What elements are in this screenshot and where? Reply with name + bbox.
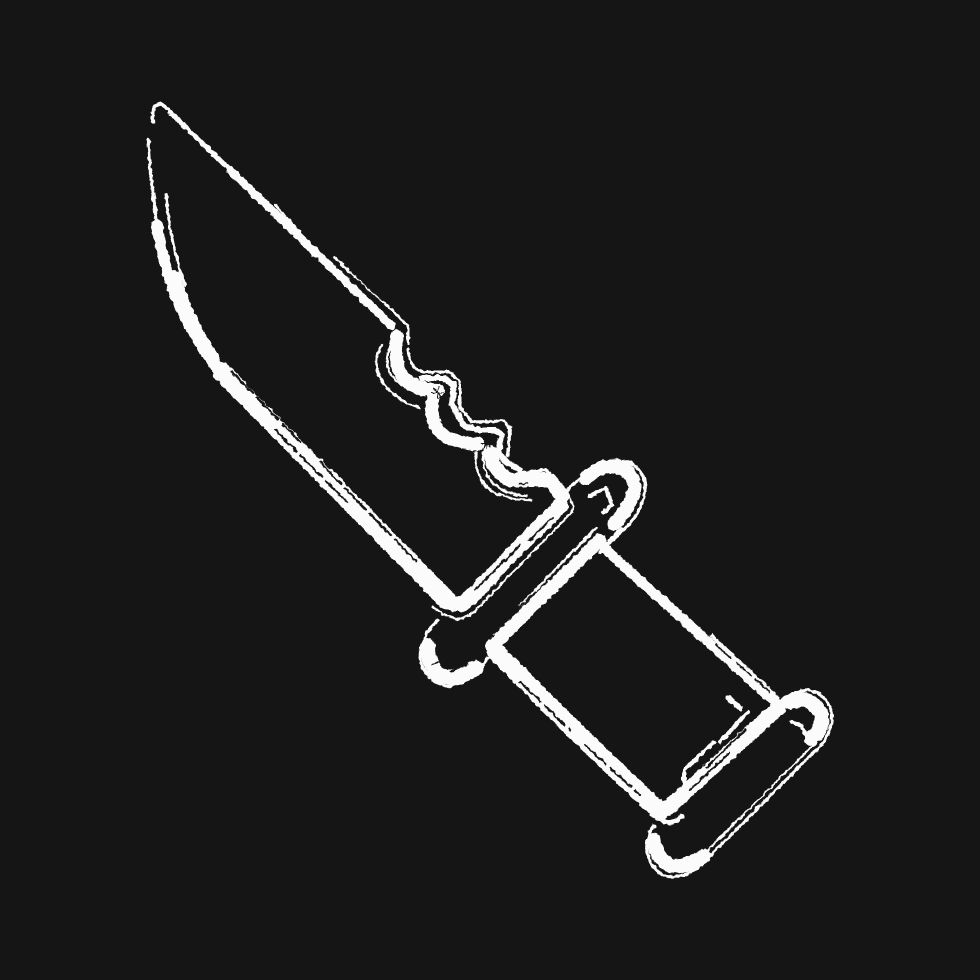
- guard: [420, 461, 645, 686]
- brush speckle stars: [432, 387, 493, 449]
- pommel: [647, 690, 832, 877]
- blade edge: [148, 140, 447, 603]
- brush speckle star: [747, 702, 759, 714]
- handle: [496, 549, 778, 812]
- blade spine: [153, 104, 408, 344]
- blade base: [433, 494, 572, 619]
- serrated section: [376, 336, 562, 500]
- icon: knife in chalk brush style: [148, 104, 832, 877]
